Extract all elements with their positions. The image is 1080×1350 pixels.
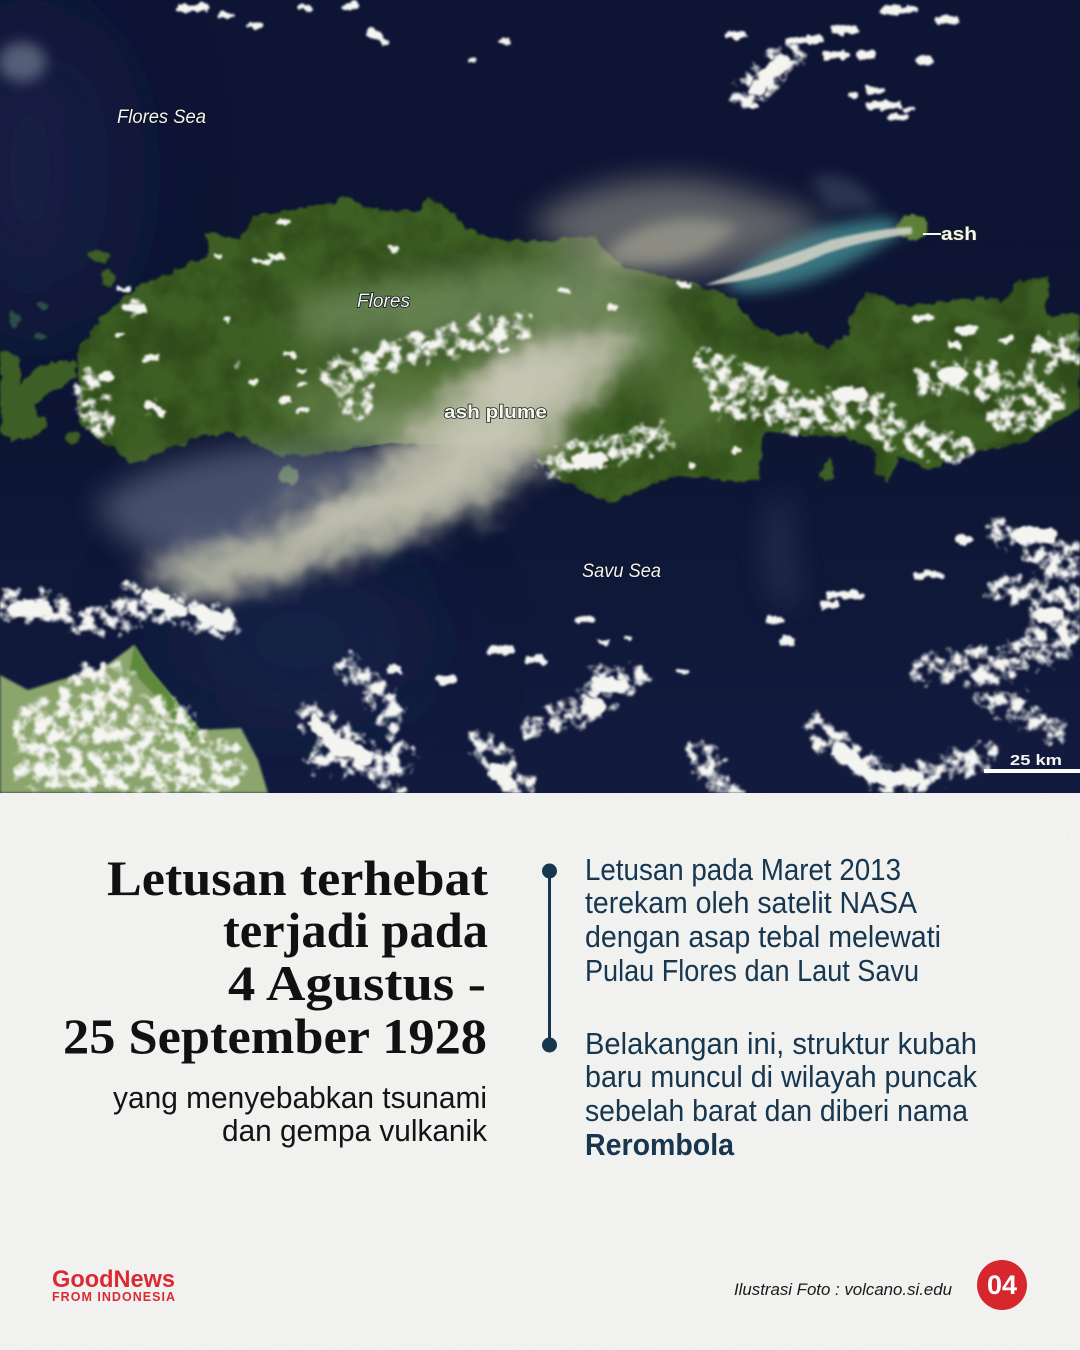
land mottling	[77, 201, 1080, 501]
ocean tonal variation	[0, 31, 380, 696]
map label: ash with leader line: ash	[941, 224, 977, 244]
text block: Rerombola dome: Rerombola	[585, 1127, 735, 1162]
bottom-left island	[0, 645, 268, 793]
cumulus cloud masses	[0, 55, 1080, 795]
text block: Rerombola dome: baru muncul di wilayah puncak	[585, 1059, 977, 1094]
lighter vegetation and ash haze on land	[270, 245, 730, 450]
logo: GoodNews from Indonesia: FROM INDONESIA	[52, 1290, 175, 1304]
map label: Flores: Flores	[357, 291, 410, 312]
subheading: effects: yang menyebabkan tsunami	[113, 1080, 487, 1115]
map label: Flores Sea: Flores Sea	[117, 107, 206, 128]
timeline connector with two dots	[542, 864, 557, 1052]
text block: March 2013 eruption: Letusan pada Maret 2013	[585, 852, 901, 887]
teal shallows near the volcano	[725, 218, 905, 292]
text block: Rerombola dome: sebelah barat dan diberi nama	[585, 1093, 969, 1128]
scale bar: 25 km	[984, 752, 1080, 773]
Flores main island	[77, 197, 1080, 503]
text block: Rerombola dome	[585, 1026, 977, 1162]
scale bar: 25 km: 25 km	[1010, 752, 1062, 769]
map label: Savu Sea: Savu Sea	[582, 561, 661, 582]
volcano plume	[530, 175, 912, 610]
heading: eruption date: Letusan terhebat	[107, 850, 488, 906]
heading: eruption date: terjadi pada	[223, 902, 488, 958]
satellite photo: Flores volcano ash plume	[0, 0, 1080, 795]
ash plume over the Savu Sea	[95, 330, 645, 600]
subheading: effects: dan gempa vulkanik	[222, 1113, 487, 1148]
subheading: effects	[113, 1080, 487, 1148]
page number badge	[977, 1260, 1027, 1310]
paper background	[0, 793, 1080, 1350]
heading: eruption date: 25 September 1928	[63, 1008, 487, 1064]
map label: ash plume: ash plume	[444, 402, 547, 422]
text block: March 2013 eruption: terekam oleh satelit NASA	[585, 885, 917, 920]
small islands	[0, 214, 928, 484]
text block: March 2013 eruption: Pulau Flores dan Laut Savu	[585, 953, 919, 988]
text block: Rerombola dome: Belakangan ini, struktur kubah	[585, 1026, 977, 1061]
page number badge: 04	[987, 1270, 1017, 1300]
heading: eruption date: 4 Agustus -	[228, 955, 486, 1011]
heading: eruption date	[63, 850, 488, 1064]
grey cloud puff, top left	[0, 42, 46, 82]
text block: March 2013 eruption: dengan asap tebal melewati	[585, 919, 941, 954]
photo credit: Ilustrasi Foto : volcano.si.edu	[734, 1280, 953, 1299]
bright cloud cores	[15, 6, 1058, 785]
map label: ash with leader line	[923, 226, 976, 241]
text block: March 2013 eruption	[585, 852, 941, 988]
logo: GoodNews from Indonesia: GoodNews	[52, 1266, 175, 1293]
